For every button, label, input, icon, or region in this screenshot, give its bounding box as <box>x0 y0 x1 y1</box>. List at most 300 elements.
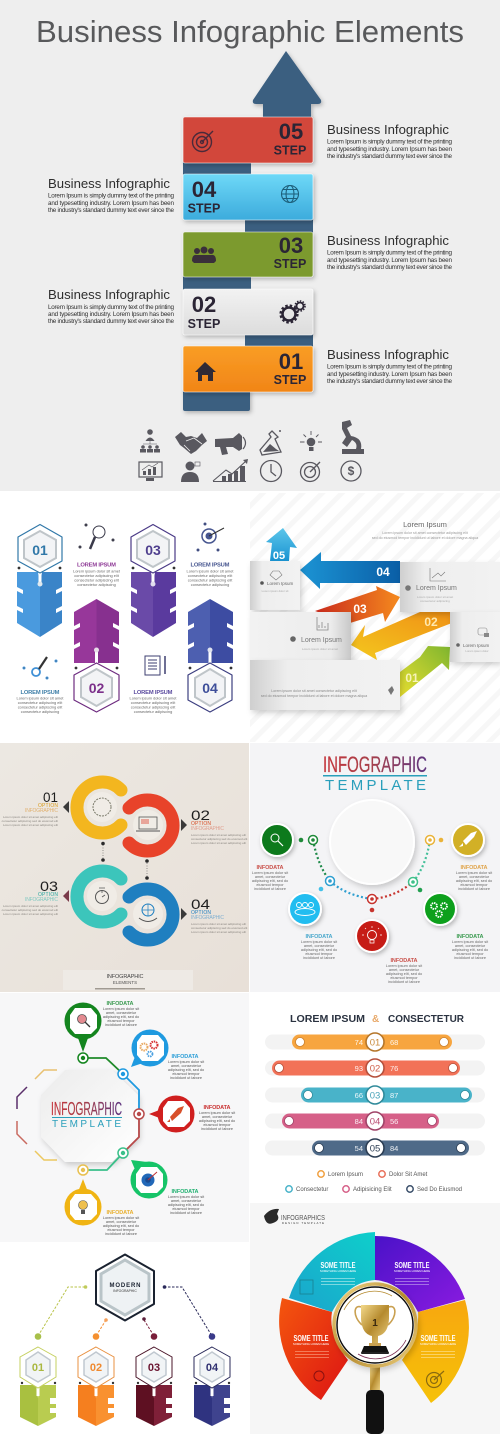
text block: step 04: and typesetting industry. Lorem Ipsum has been <box>48 200 174 207</box>
text: infodata 1: incididunt ut labore <box>254 887 286 891</box>
arrow: navy upward <box>253 51 321 120</box>
text: 03 caption: LOREM IPSUM <box>134 690 173 696</box>
central circle <box>330 800 414 884</box>
text: option 01 <box>2 789 58 827</box>
text: infodata red: incididunt ut labore <box>201 1127 233 1131</box>
text: 02 caption: Lorem ipsum dolor sit amet <box>73 568 121 574</box>
panel: octagon network <box>0 993 249 1242</box>
panel: trophy magnifier <box>250 1203 500 1434</box>
text block: step 05 <box>327 122 452 160</box>
text: infodata 1: adipiscing elit, sed do <box>252 879 288 883</box>
heading: CONSECTETUR <box>388 1014 465 1025</box>
step numbers <box>273 550 438 685</box>
text: infodata 3: amet, consectetur <box>389 968 420 972</box>
text block: step 03: the industry's standard dummy text ever since the <box>327 264 452 271</box>
icon: people <box>192 246 216 263</box>
icon row: second row pictograms: $ <box>348 464 355 478</box>
text: infodata 5: amet, consectetur <box>459 875 490 879</box>
text block: step 02: Business Infographic <box>48 287 170 302</box>
text: option 03: Lorem ipsum dolor sit amet adipiscing elit <box>3 912 58 916</box>
box 01 text card: sed do eiusmod tempor incididunt ut labore et dolore magna aliqua <box>261 694 367 698</box>
bar 04: 04 <box>370 1116 380 1128</box>
text: infodata top: Lorem ipsum dolor sit <box>103 1007 140 1011</box>
bar 04 <box>282 1112 439 1130</box>
pin: target <box>130 1160 168 1198</box>
bar 03: 87 <box>390 1091 398 1100</box>
central hexagon: INFOGRAPHIC <box>113 1289 137 1293</box>
text block: step 02: Lorem Ipsum is simply dummy text of the printing <box>48 304 174 311</box>
column 04 <box>188 599 233 712</box>
text: infodata green <box>168 1189 205 1215</box>
text: infodata blue: incididunt ut labore <box>170 1076 202 1080</box>
text: 03 caption: Lorem ipsum dolor sit amet <box>130 696 177 700</box>
text: infodata 2 <box>301 934 338 960</box>
wedge: purple <box>375 1236 465 1312</box>
text: infodata 3 <box>386 958 423 984</box>
text: option 04: Lorem ipsum dolor sit amet adipiscing elit <box>191 930 246 934</box>
text: infodata red: adipiscing elit, sed do <box>199 1119 235 1123</box>
text block: step 05: Business Infographic <box>327 122 449 137</box>
panel: four hexagon columns <box>0 493 249 742</box>
column 04 <box>194 1347 230 1426</box>
column 02 <box>74 599 119 712</box>
card: step 01: 01 <box>279 349 303 374</box>
text: infodata green: amet, consectetur <box>171 1199 202 1203</box>
text: infodata blue: amet, consectetur <box>171 1064 202 1068</box>
box 04 text card <box>400 562 500 612</box>
column 02: 02 <box>90 1362 102 1374</box>
text: infodata 2: eiusmod tempor <box>305 952 333 956</box>
connector dots <box>35 1285 215 1340</box>
heading block: Lorem Ipsum <box>403 520 447 529</box>
text: option 02: Lorem ipsum dolor sit amet adipiscing elit <box>191 841 246 845</box>
text: option 02: INFOGRAPHIC <box>191 826 224 832</box>
title: Business Infographic Elements <box>36 14 464 49</box>
text block: step 02 <box>48 287 174 325</box>
bar 03: 03 <box>370 1090 380 1102</box>
text block: step 05: and typesetting industry. Lorem Ipsum has been <box>327 146 452 153</box>
text: 02 caption: consectetur adipiscing elit <box>74 573 120 578</box>
text block: step 03 <box>327 233 452 271</box>
bar 02: 93 <box>355 1064 363 1073</box>
text: infodata 4: adipiscing elit, sed do <box>452 948 488 952</box>
network nodes <box>78 1053 144 1175</box>
text: 03 caption: consectetur adipiscing <box>134 709 172 714</box>
text block: step 01: and typesetting industry. Lorem Ipsum has been <box>327 371 452 378</box>
text block: step 03: Business Infographic <box>327 233 449 248</box>
tracks <box>265 1034 485 1156</box>
text: 02 caption <box>73 562 121 587</box>
logo: DESIGN TEMPLATE <box>282 1221 324 1225</box>
column 04: 04 <box>206 1362 219 1374</box>
text: infodata 1: amet, consectetur <box>255 875 286 879</box>
text: infodata 1 <box>252 865 289 891</box>
ring 02 <box>129 800 173 851</box>
text: infodata green: incididunt ut labore <box>170 1211 202 1215</box>
text: infodata green: adipiscing elit, sed do <box>168 1203 204 1207</box>
arrow 04 <box>300 552 400 589</box>
text: infodata 2: amet, consectetur <box>304 944 335 948</box>
text block: step 02: and typesetting industry. Lorem Ipsum has been <box>48 311 174 318</box>
pin: rocket <box>149 1096 194 1132</box>
text: option 01: Lorem ipsum dolor sit amet adipiscing elit <box>3 823 58 827</box>
text: infodata 4: Lorem ipsum dolor sit <box>452 940 489 944</box>
logo: INFOGRAPHICS <box>281 1213 325 1222</box>
heading: & <box>372 1014 379 1025</box>
card: step 03: STEP <box>274 257 306 271</box>
footer label: INFOGRAPHIC <box>106 974 144 980</box>
octagon title <box>51 1099 122 1130</box>
badge: gears <box>423 892 457 926</box>
text block: step 02: the industry's standard dummy text ever since the <box>48 318 174 325</box>
heading <box>290 1014 465 1025</box>
box 03 text card: Lorem ipsum dolor sit amet <box>302 647 338 651</box>
legend: Dolor Sit Amet <box>389 1172 428 1178</box>
text: option 01: consectetur adipiscing sed do eiusmod elit <box>2 819 58 823</box>
text: infodata blue <box>168 1054 205 1080</box>
outer octagon dashes <box>17 1070 57 1160</box>
bar 01: 74 <box>355 1038 363 1047</box>
text block: step 04: Business Infographic <box>48 176 170 191</box>
column 03: 03 <box>145 542 161 558</box>
text: infodata 1: Lorem ipsum dolor sit <box>252 871 289 875</box>
text: option 02: Lorem ipsum dolor sit amet adipiscing elit <box>191 833 246 837</box>
text: infodata top: INFODATA <box>106 1001 134 1007</box>
wedge: orange <box>402 1300 469 1403</box>
text: 03 caption: consectetur adipiscing elit <box>131 700 176 705</box>
heading: LOREM IPSUM <box>290 1014 365 1025</box>
card: step 03 <box>183 232 313 277</box>
text: infodata 4 <box>452 934 489 960</box>
panel: business infographic elements <box>0 0 500 491</box>
column 03: 03 <box>148 1362 160 1374</box>
wedge: red <box>279 1298 348 1400</box>
text: infodata green: eiusmod tempor <box>172 1207 200 1211</box>
magnifier handle <box>366 1366 384 1434</box>
panel: circular options <box>0 743 249 992</box>
panel: bar ranges <box>250 993 500 1201</box>
text: infodata 5 <box>456 865 493 891</box>
text: infodata 4: eiusmod tempor <box>456 952 484 956</box>
bar 01: 68 <box>390 1038 398 1047</box>
text: infodata 3: eiusmod tempor <box>390 976 418 980</box>
text: option 01: INFOGRAPHIC <box>25 808 58 814</box>
icon: target <box>192 131 213 152</box>
box 02 text card: Lorem ipsum dolor <box>465 649 489 653</box>
icon: key <box>23 657 57 679</box>
text: infodata 5: Lorem ipsum dolor sit <box>456 871 493 875</box>
text: option 03: OPTION <box>38 892 58 898</box>
arrow 01 <box>400 646 450 697</box>
legend: Adipisicing Elit <box>353 1187 392 1193</box>
card: step 04: STEP <box>188 202 220 216</box>
title: INFOGRAPHIC <box>323 752 427 777</box>
bar 05: 84 <box>390 1144 398 1153</box>
badge: rocket <box>451 823 485 857</box>
card: step 04: 04 <box>192 177 217 202</box>
text: infodata red: amet, consectetur <box>202 1115 233 1119</box>
title: TEMPLATE <box>325 777 426 794</box>
bar 02 <box>272 1059 460 1077</box>
card: step 01 <box>183 346 313 392</box>
text: infodata 1: INFODATA <box>256 865 284 871</box>
logo <box>264 1209 325 1225</box>
card: step 02 <box>183 289 313 335</box>
text: infodata 2: incididunt ut labore <box>303 956 335 960</box>
box 04 text card: consectetur adipiscing <box>420 599 450 603</box>
wedge: orange: SOMETHING LOREM HERE <box>420 1342 456 1346</box>
box 04 text card: Lorem ipsum dolor sit amet <box>417 595 453 599</box>
text: infodata yellow: amet, consectetur <box>106 1220 137 1224</box>
text block: step 01: Business Infographic <box>327 347 449 362</box>
text block: step 01 <box>327 347 452 385</box>
text: infodata blue: Lorem ipsum dolor sit <box>168 1060 205 1064</box>
text: option 02 <box>191 807 248 845</box>
arrow 02 <box>351 612 480 660</box>
text: infodata yellow: incididunt ut labore <box>105 1232 137 1236</box>
card: step 02: STEP <box>188 317 220 331</box>
column 02 <box>78 1347 114 1426</box>
footer label <box>63 970 193 990</box>
text: 01 caption: Lorem ipsum dolor sit amet <box>17 696 64 700</box>
text: option 03: INFOGRAPHIC <box>25 897 58 903</box>
text: 03 caption: consectetur adipiscing elit <box>131 704 176 710</box>
legend: Consectetur <box>296 1187 328 1193</box>
column 04: 04 <box>202 680 218 696</box>
text: option 04: consectetur adipiscing sed do eiusmod elit <box>191 926 248 930</box>
badge: search <box>260 823 294 857</box>
text: infodata 2: INFODATA <box>306 934 333 940</box>
octagon title: INFOGRAPHIC <box>51 1099 122 1119</box>
text: option 03: consectetur adipiscing sed do eiusmod elit <box>2 908 58 912</box>
text: option 04: Lorem ipsum dolor sit amet adipiscing elit <box>191 922 246 926</box>
wedge: purple: SOME TITLE <box>394 1261 430 1270</box>
box 05: Lorem Ipsum <box>267 581 294 586</box>
box 02 text card <box>450 612 500 662</box>
badge: people <box>288 892 322 926</box>
arrows on rings <box>63 801 187 920</box>
dotted links <box>101 842 149 880</box>
text: infodata green: Lorem ipsum dolor sit <box>168 1195 205 1199</box>
text block: step 03: and typesetting industry. Lorem Ipsum has been <box>327 257 452 264</box>
text: 02 caption: consectetur adipiscing <box>77 582 116 587</box>
column 01: 01 <box>32 1362 44 1374</box>
text: 04 caption: LOREM IPSUM <box>190 562 230 568</box>
trophy <box>355 1305 395 1354</box>
ring 04 <box>129 889 173 940</box>
column 01 <box>17 524 62 637</box>
magnifier lens <box>334 1284 416 1366</box>
text: option 02: OPTION <box>191 821 211 827</box>
panel: paper arrows <box>250 493 500 742</box>
panel: infodata arc <box>250 743 500 992</box>
text: option 03: Lorem ipsum dolor sit amet adipiscing elit <box>3 904 58 908</box>
text: 01 caption <box>17 690 64 714</box>
step numbers: 01 <box>405 671 419 685</box>
bar 01 <box>292 1033 452 1051</box>
text: infodata red: INFODATA <box>204 1105 231 1111</box>
text: infodata 4: incididunt ut labore <box>454 956 486 960</box>
column 03 <box>131 524 176 637</box>
column 02: 02 <box>89 680 104 696</box>
text: infodata yellow: INFODATA <box>106 1210 134 1216</box>
text: infodata yellow <box>103 1210 140 1236</box>
wedge: teal <box>289 1232 375 1312</box>
text: option 02: 02 <box>191 807 210 823</box>
pin: gears <box>131 1030 168 1067</box>
octagon title: TEMPLATE <box>52 1119 121 1130</box>
text: infodata 5: incididunt ut labore <box>458 887 490 891</box>
icon: globe <box>282 186 298 202</box>
text: option 03 <box>2 878 58 916</box>
ring 01 <box>77 782 121 833</box>
text: infodata 3: INFODATA <box>390 958 418 964</box>
text: 02 caption: LOREM IPSUM <box>77 562 116 568</box>
text: infodata 2: adipiscing elit, sed do <box>301 948 337 952</box>
text: infodata yellow: Lorem ipsum dolor sit <box>103 1216 140 1220</box>
text block: step 04 <box>48 176 174 214</box>
bar 03 <box>301 1086 472 1104</box>
text block: step 03: Lorem Ipsum is simply dummy text of the printing <box>327 250 452 256</box>
connector strips <box>183 160 313 411</box>
card: step 04 <box>183 174 313 220</box>
text: infodata red: eiusmod tempor <box>203 1123 231 1127</box>
icon: magnifier <box>79 524 114 549</box>
panel: modern hexagons <box>0 1243 249 1434</box>
text: infodata 4: INFODATA <box>456 934 484 940</box>
bar 05: 05 <box>370 1144 380 1154</box>
box 03 text card <box>250 612 351 660</box>
bar 02: 02 <box>370 1064 380 1074</box>
heading block <box>372 520 478 540</box>
text: infodata 3: adipiscing elit, sed do <box>386 972 422 976</box>
pin: search <box>64 1002 102 1052</box>
footer label: ELEMENTS <box>113 980 137 985</box>
text: 03 caption <box>130 690 177 714</box>
step numbers: 02 <box>424 615 438 629</box>
icon row: second row pictograms <box>139 459 361 482</box>
title <box>323 752 427 794</box>
bar 05: 54 <box>355 1144 363 1153</box>
card: step 05: STEP <box>274 144 306 158</box>
dotted arc <box>313 840 430 899</box>
icon: gears <box>280 301 305 322</box>
text: infodata top: eiusmod tempor <box>107 1019 135 1023</box>
text: infodata 2: Lorem ipsum dolor sit <box>301 940 338 944</box>
text: option 04: INFOGRAPHIC <box>191 915 224 921</box>
wedge: teal: SOMETHING LOREM HERE <box>320 1269 356 1273</box>
icon: target <box>197 523 224 551</box>
text: infodata top <box>103 1001 140 1027</box>
wedge: red: SOME TITLE <box>294 1334 329 1343</box>
text: infodata blue: eiusmod tempor <box>172 1072 200 1076</box>
text: option 01: 01 <box>43 789 58 805</box>
badge: bulb <box>355 919 389 953</box>
box 05: Lorem ipsum dolor sit <box>262 589 289 593</box>
card: step 02: 02 <box>192 292 216 317</box>
heading block: sed do eiusmod tempor incididunt ut labore et dolore magna aliqua <box>372 536 478 540</box>
dashed connectors <box>38 1287 212 1336</box>
text: 04 caption: consectetur adipiscing elit <box>188 573 233 578</box>
text: 04 caption: consectetur adipiscing elit <box>188 578 233 582</box>
text: infodata 5: INFODATA <box>460 865 488 871</box>
text: infodata blue: adipiscing elit, sed do <box>168 1068 204 1072</box>
card: step 05 <box>183 117 313 163</box>
text: infodata blue: INFODATA <box>172 1054 199 1060</box>
box 01 text card: Lorem ipsum dolor sit amet consectetur adipiscing elit <box>271 689 357 693</box>
central hexagon <box>96 1254 154 1320</box>
network lines <box>83 1058 139 1170</box>
text: infodata 1: eiusmod tempor <box>256 883 284 887</box>
text: option 01: Lorem ipsum dolor sit amet adipiscing elit <box>3 815 58 819</box>
icon: document <box>145 656 165 675</box>
text: 02 caption: consectetur adipiscing elit <box>74 578 120 582</box>
text: infodata 5: adipiscing elit, sed do <box>456 879 492 883</box>
card: step 05: 05 <box>279 119 303 144</box>
ring 03 <box>77 871 121 922</box>
text: infodata green: INFODATA <box>172 1189 199 1195</box>
bar 04: 56 <box>390 1117 398 1126</box>
box 04 text card: Lorem Ipsum <box>416 585 457 592</box>
text: infodata 4: amet, consectetur <box>455 944 486 948</box>
step numbers: 03 <box>353 602 367 616</box>
bar 02: 76 <box>390 1064 398 1073</box>
text: 01 caption: consectetur adipiscing elit <box>18 704 63 710</box>
text block: step 05: Lorem Ipsum is simply dummy text of the printing <box>327 138 452 146</box>
column 03 <box>136 1347 172 1426</box>
icon: house <box>195 362 216 381</box>
text: 01 caption: consectetur adipiscing elit <box>18 700 63 705</box>
heading block: Lorem ipsum dolor sit amet consectetur adipiscing elit <box>382 531 468 535</box>
wedge: orange: SOME TITLE <box>420 1334 456 1343</box>
text: infodata top: incididunt ut labore <box>105 1023 137 1027</box>
wedge: red: SOMETHING LOREM HERE <box>293 1342 329 1346</box>
step numbers: 05 <box>273 550 285 562</box>
text: infodata red <box>199 1105 236 1131</box>
text: infodata yellow: eiusmod tempor <box>107 1228 135 1232</box>
text: 04 caption: Lorem ipsum dolor sit amet <box>187 568 234 574</box>
wedge: teal: SOME TITLE <box>320 1261 356 1270</box>
text: option 01: OPTION <box>38 803 58 809</box>
card: step 01: STEP <box>274 373 306 387</box>
text: option 04: 04 <box>191 896 210 912</box>
box 01 text card <box>250 660 400 710</box>
pin: bulb <box>64 1179 102 1226</box>
column 01: 01 <box>32 542 48 558</box>
box 02 text card: Lorem Ipsum <box>463 643 490 648</box>
legend: Sed Do Eiusmod <box>417 1187 462 1193</box>
text: infodata top: amet, consectetur <box>106 1011 137 1015</box>
trophy: 1 <box>372 1318 378 1329</box>
text: 01 caption: consectetur adipiscing <box>21 709 59 714</box>
arrow 03 <box>315 586 400 623</box>
legend <box>286 1171 462 1193</box>
legend: Lorem Ipsum <box>328 1172 363 1178</box>
text: option 03: 03 <box>40 878 58 894</box>
step numbers: 04 <box>376 565 390 579</box>
text block: step 04: the industry's standard dummy text ever since the <box>48 207 174 214</box>
text block: step 05: the industry's standard dummy text ever since the <box>327 153 452 160</box>
wedge: purple: SOMETHING LOREM HERE <box>394 1269 430 1273</box>
text: infodata 3: incididunt ut labore <box>388 980 420 984</box>
text: 01 caption: LOREM IPSUM <box>20 690 60 696</box>
bar 01: 01 <box>370 1038 380 1048</box>
text: 04 caption: consectetur adipiscing <box>191 582 229 587</box>
text: option 02: consectetur adipiscing sed do eiusmod elit <box>191 837 248 841</box>
box 05 <box>250 561 300 610</box>
bar 05 <box>312 1139 469 1157</box>
central hexagon: MODERN <box>110 1283 140 1289</box>
